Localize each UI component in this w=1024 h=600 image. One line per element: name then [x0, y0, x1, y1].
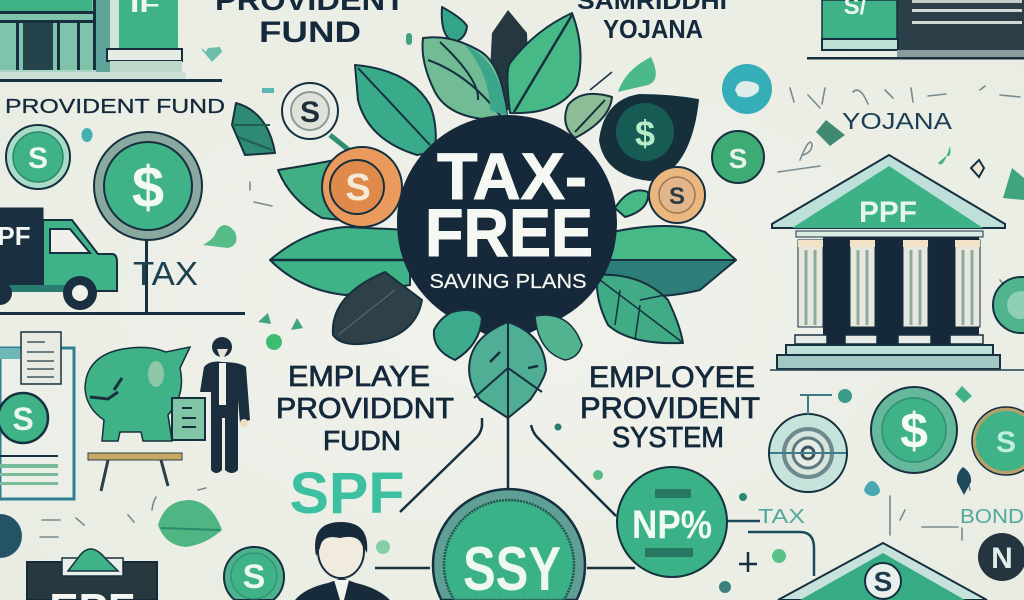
icon: N coin [978, 533, 1024, 581]
leaf: small dark-teal left [232, 103, 275, 155]
leaf: lower-right bud [535, 315, 582, 360]
label: Provident Fund left: PROVIDENT FUND [5, 95, 225, 118]
title disc: tax-free saving plans [397, 115, 617, 344]
leaf: green small top right [618, 57, 656, 92]
orange coin: S [345, 167, 371, 209]
title text: TAX- [437, 139, 587, 213]
icon: plus mark [739, 552, 757, 572]
label: SPF teal: SPF [290, 461, 404, 526]
icon: S coin with gold ring [972, 407, 1024, 475]
small decorative marks [40, 86, 1020, 540]
icon: dollar sign on a stand: $ [132, 155, 164, 220]
leaf: thin stem to white coin [330, 135, 355, 155]
leaf: small green right mid [615, 190, 648, 217]
icon: S coin bottom: S [243, 558, 265, 596]
illustration: top-left bank building [0, 0, 222, 82]
label: Emplaye Providdnt Fudn [276, 361, 454, 456]
label: Yojana right: YOJANA [842, 108, 953, 134]
divider line left [0, 312, 245, 315]
label: Employee Provident System: SYSTEM [612, 422, 724, 454]
icon: pin marker [957, 467, 971, 495]
icon: businessman bust [295, 522, 390, 600]
illustration: bottom roof [778, 543, 987, 600]
bottom centre leaves [434, 310, 582, 418]
dark coin bubble: $ [635, 113, 655, 154]
icon: water drop [82, 128, 92, 142]
panel: document with coin: S [12, 401, 34, 437]
subtitle text: SAVING PLANS [430, 271, 586, 293]
leaf: centre pair [469, 322, 546, 418]
leaf: green left mid [278, 160, 360, 222]
icon: standing person with clipboard [172, 337, 250, 473]
icon: S coin with gold ring: S [996, 426, 1016, 459]
icon: dark coin bottom-left [0, 514, 22, 558]
panel: document with coin [0, 332, 74, 499]
leaf: mottled upper left [422, 37, 507, 120]
label: Employee Provident System: PROVIDENT [580, 392, 760, 425]
white S coin [282, 83, 338, 139]
label: Tax left: TAX [133, 255, 198, 292]
leaf: small mottled right [565, 94, 612, 138]
central leaf cluster [232, 7, 736, 344]
connector lines [375, 418, 814, 576]
label: Bond: BOND [960, 506, 1024, 528]
label: Emplaye Providdnt Fudn: PROVIDDNT [276, 393, 454, 425]
icon: PF delivery truck [0, 208, 117, 310]
heading: Provident Fund top [215, 0, 405, 49]
label: Employee Provident System: EMPLOYEE [589, 361, 755, 394]
icon: NP% coin: NP% [632, 503, 712, 547]
icon: NP% coin [617, 467, 727, 577]
panel: EPF clipboard [27, 549, 157, 600]
illustration: top-right ledger [807, 0, 1024, 60]
leaf: big horizontal left [270, 227, 410, 295]
icon: PF temple building [770, 155, 1024, 371]
icon: target dial [769, 395, 847, 492]
icon: dollar sign on a stand [94, 132, 202, 313]
icon: green coin right upper: S [729, 143, 747, 174]
heading: Samriddhi Yojana top: YOJANA [603, 14, 703, 44]
icon: small S coin left [6, 125, 70, 189]
icon: teal spiral coin [722, 64, 772, 114]
label: Emplaye Providdnt Fudn: FUDN [323, 425, 401, 456]
leaf: lower left dark [333, 272, 422, 344]
icon: small S coin left: S [28, 142, 48, 175]
leaf: lower-left bud [434, 310, 482, 360]
title text: FREE [425, 195, 593, 271]
heading: Provident Fund top: FUND [259, 16, 361, 49]
white S coin: S [300, 96, 320, 129]
icon: small ornaments right [816, 120, 1024, 200]
leaf: lower right veined [597, 275, 683, 343]
tan coin [649, 167, 705, 223]
icon: green blobs [202, 33, 972, 593]
leaf: dark top centre [488, 10, 530, 110]
icon: green dome [158, 500, 222, 547]
icon: green coin right upper [712, 131, 764, 183]
leaf: upper left big [355, 65, 436, 155]
label: Tax bottom: TAX [758, 506, 805, 528]
heading: Samriddhi Yojana top [577, 0, 727, 44]
icon: right edge green coin [993, 277, 1024, 333]
S coin [0, 393, 48, 443]
orange coin [322, 147, 402, 227]
icon: SSY coin [433, 489, 585, 600]
label: Employee Provident System [580, 361, 760, 454]
icon: S coin bottom [224, 547, 284, 600]
leaf: upper right green [508, 13, 581, 113]
label: Emplaye Providdnt Fudn: EMPLAYE [288, 361, 430, 393]
tan coin: S [669, 183, 685, 210]
leaf: small teal top [442, 7, 467, 42]
icon: PF temple building: PPF [859, 196, 917, 229]
illustration: bottom roof: S [874, 566, 892, 597]
title text [425, 139, 593, 293]
icon: piggy bank on table [85, 347, 190, 491]
icon: N coin: N [991, 542, 1013, 575]
leaf: big horizontal right [600, 226, 736, 260]
icon: large dollar coin right: $ [900, 403, 928, 459]
dark coin bubble [600, 95, 698, 180]
icon: large dollar coin right [871, 387, 957, 473]
document sheet [21, 332, 61, 384]
